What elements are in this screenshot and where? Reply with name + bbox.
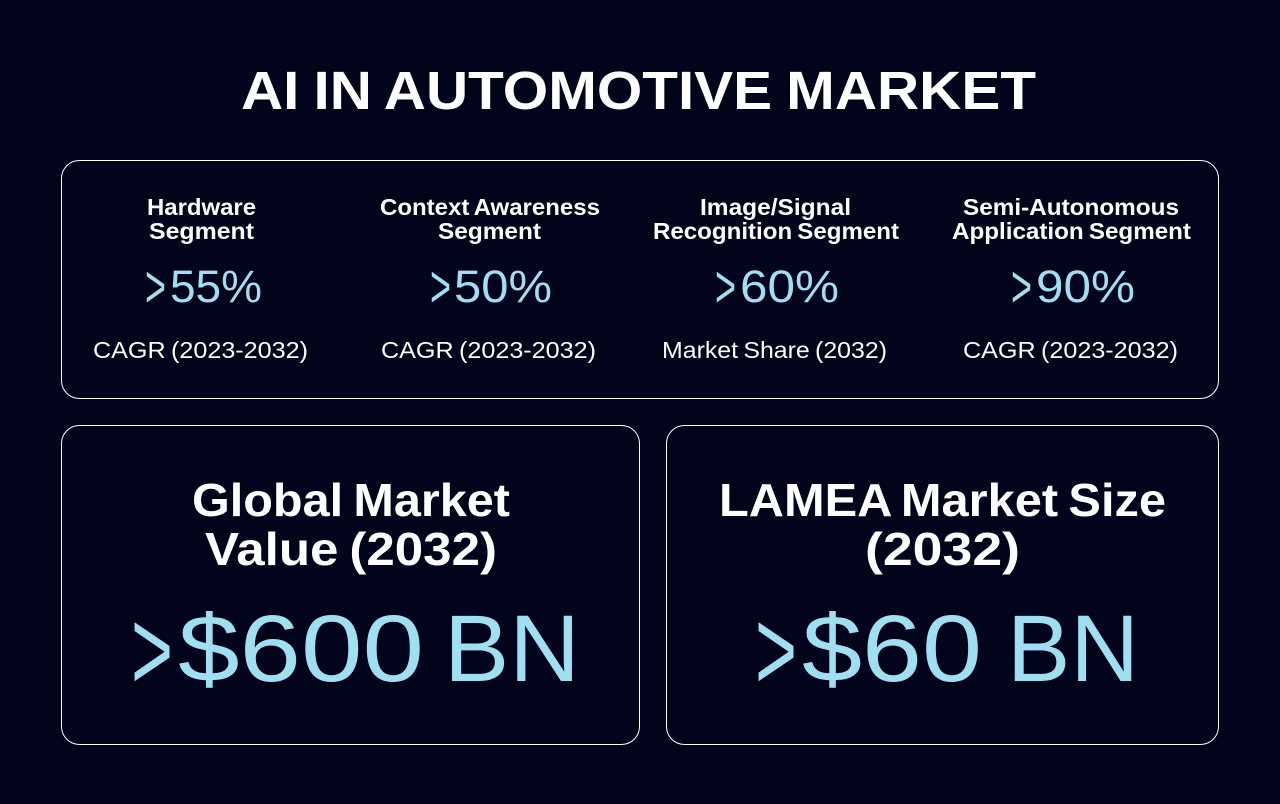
caption: CAGR: CAGR (2023-2032) [381, 337, 596, 363]
value: greater than 50 percent: 50% [454, 261, 552, 312]
value: greater than 600 billion dollars: BN [444, 596, 580, 702]
heading: image and signal recognition segment: Recognition Segment [653, 218, 899, 244]
panel outline [62, 160, 1218, 398]
panel: global market value [62, 426, 640, 744]
value: greater than 60 percent [715, 253, 839, 320]
value: greater than 60 percent: 60% [740, 261, 839, 312]
heading: LAMEA market size 2032: (2032) [865, 523, 1020, 575]
heading: LAMEA market size 2032: LAMEA Market Size [719, 474, 1166, 526]
value: greater than 60 percent: > [715, 253, 736, 320]
value: greater than 600 billion dollars: > [131, 585, 173, 715]
panel: segment statistics [62, 160, 1218, 398]
heading: semi-autonomous application segment: Semi-Autonomous [963, 194, 1179, 220]
value: greater than 55 percent: 55% [170, 261, 262, 312]
heading: semi-autonomous application segment [952, 194, 1191, 244]
value: greater than 60 billion dollars [755, 585, 1139, 715]
heading: LAMEA market size 2032 [719, 474, 1166, 575]
heading: hardware segment [147, 194, 256, 244]
stat: context awareness segment [380, 194, 600, 363]
value: greater than 600 billion dollars [131, 585, 580, 715]
caption: market share: Market Share (2032) [662, 337, 887, 363]
value: greater than 50 percent [430, 253, 552, 320]
heading: hardware segment: Hardware [147, 194, 256, 220]
title: AI IN AUTOMOTIVE MARKET [241, 61, 1036, 121]
value: greater than 600 billion dollars: $600 [178, 596, 424, 702]
heading: context awareness segment [380, 194, 600, 244]
panel outline [62, 426, 640, 744]
heading: hardware segment: Segment [149, 218, 254, 244]
heading: global market value 2032: Value (2032) [205, 523, 497, 575]
panel: LAMEA market size [666, 426, 1218, 744]
heading: image and signal recognition segment: Image/Signal [700, 194, 851, 220]
value: greater than 60 billion dollars: $60 [802, 596, 982, 702]
heading: global market value 2032: Global Market [192, 474, 510, 526]
caption: CAGR: CAGR (2023-2032) [93, 337, 308, 363]
stat: image and signal recognition segment [653, 194, 899, 363]
heading: image and signal recognition segment [653, 194, 899, 244]
stat: semi-autonomous application segment [952, 194, 1191, 363]
heading: context awareness segment: Context Awareness [380, 194, 600, 220]
value: greater than 60 billion dollars: BN [1007, 596, 1139, 702]
heading: global market value 2032 [192, 474, 510, 575]
value: greater than 90 percent [1011, 253, 1135, 320]
value: greater than 55 percent [145, 253, 262, 320]
value: greater than 55 percent: > [145, 253, 166, 320]
stat: hardware segment [93, 194, 308, 363]
heading: context awareness segment: Segment [438, 218, 541, 244]
value: greater than 60 billion dollars: > [755, 585, 797, 715]
caption: CAGR: CAGR (2023-2032) [963, 337, 1178, 363]
value: greater than 90 percent: 90% [1036, 261, 1135, 312]
panel outline [666, 426, 1218, 744]
value: greater than 90 percent: > [1011, 253, 1032, 320]
value: greater than 50 percent: > [430, 253, 451, 320]
heading: semi-autonomous application segment: Application Segment [952, 218, 1191, 244]
